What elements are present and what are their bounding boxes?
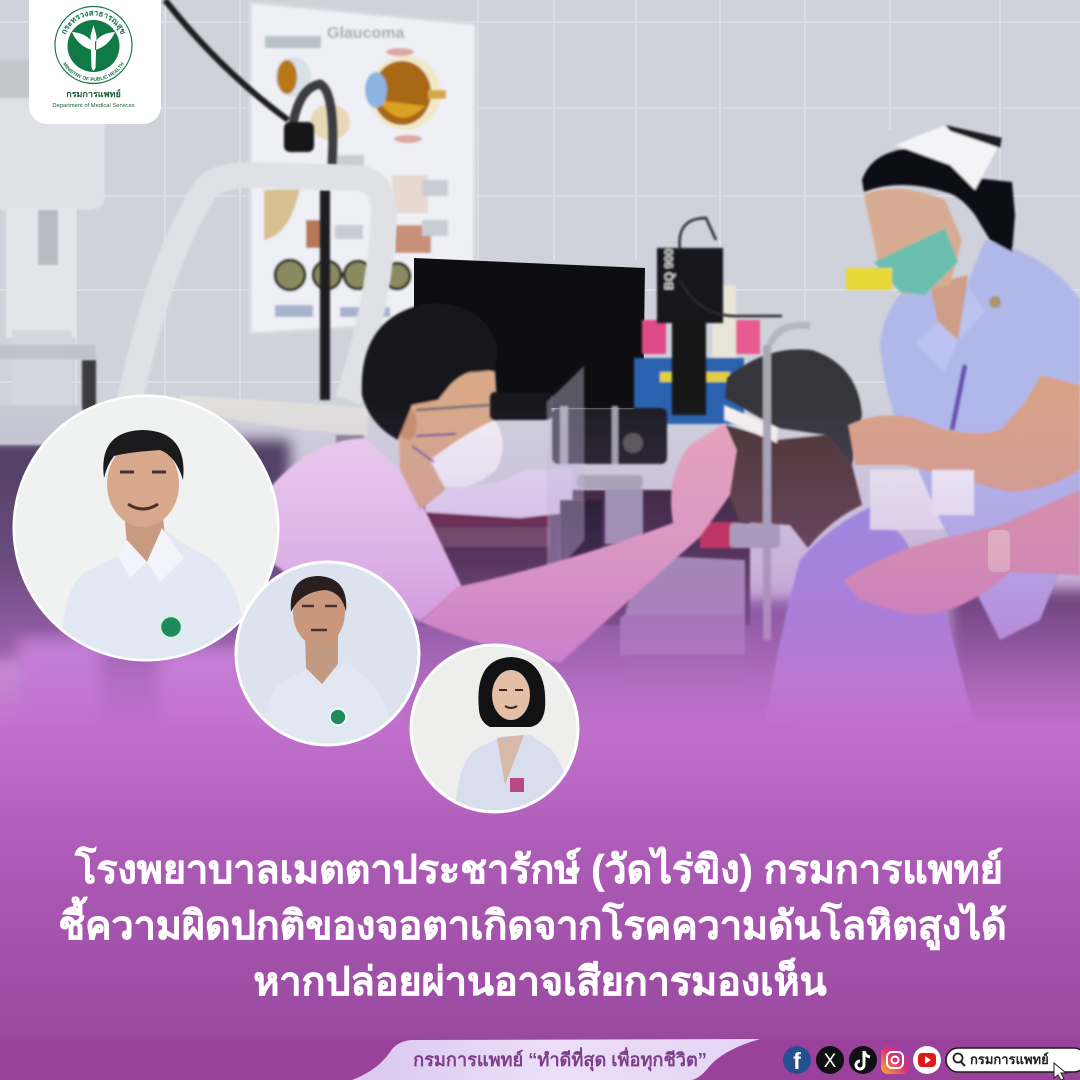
patient hair [725,349,862,465]
white supplies behind nurse [870,470,960,530]
nurse collar [915,285,985,372]
ministry emblem: กระทรวงสาธารณสุข [62,10,126,34]
icon: facebook [783,1046,811,1074]
desk with papers [420,468,750,625]
icon: tiktok [849,1046,877,1074]
slogan ribbon: กรมการแพทย์ “ทำดีที่สุด เพื่อทุกชีวิต” [413,1047,707,1072]
yellow notice [846,268,892,290]
search box [946,1048,1080,1080]
coat badge [510,778,524,792]
nurse pin [989,296,1001,308]
icon: facebook: f [793,1048,801,1074]
doctor hair [362,303,498,440]
icon: instagram [881,1046,909,1074]
eyepiece [490,392,552,420]
BQ 900 lamp unit [657,218,782,415]
microscope body [552,408,667,464]
facial features [499,690,523,708]
doctor mask [430,420,503,488]
shirt [62,530,242,659]
ministry emblem: MINISTRY OF PUBLIC HEALTH [63,62,124,81]
patient neck and face [722,425,862,548]
chin-rest crossbar [730,523,780,548]
shirt [265,662,392,750]
tiled wall [0,0,1080,780]
dark lower-room equipment [0,440,1080,770]
collar [118,528,184,582]
badge [160,616,182,638]
slogan ribbon [352,1039,760,1080]
headline line 2: ชี้ความผิดปกติของจอตาเกิดจากโรคความดันโลหิตสูงได้ [58,896,1007,950]
acrylic shield [547,366,584,582]
doctor body [268,438,462,622]
logo card [29,0,161,124]
doctor arm and hand [420,423,737,663]
facial features [120,472,166,509]
blouse [497,735,524,785]
icon: X: X [824,1051,837,1072]
patient headband [724,405,778,443]
face [492,670,530,720]
patient gown [765,505,975,725]
search box: กรมการแพทย์ [970,1052,1049,1067]
doctor head [398,370,498,510]
chin-rest base [625,555,745,622]
nurse surgical mask [874,228,958,295]
doctor mask strap [412,434,456,462]
department name: กรมการแพทย์ [66,88,121,99]
nurse uniform [880,240,1080,640]
icon: cursor [1054,1063,1066,1080]
slit lamp [490,366,780,695]
nurse [846,125,1080,640]
glaucoma poster [250,2,476,334]
hair [291,576,346,612]
red accents [700,522,742,548]
assisting hands [843,490,1080,615]
doctor [268,303,503,622]
left instrument [0,60,105,445]
arm support [577,475,643,489]
face [107,450,179,527]
nurse hair [862,148,1015,252]
logo card: Department of Medical Services [52,103,135,109]
facial features [302,606,337,630]
icon: youtube [913,1046,941,1074]
chin-rest pole [763,345,771,640]
white head-rest arch [130,175,384,545]
social icons [783,1046,941,1074]
glaucoma poster: Glaucoma [327,25,404,42]
nurse id card [932,470,974,515]
nurse neck [930,275,968,340]
hair [478,657,545,727]
neck [305,635,338,684]
nurse face [864,189,962,295]
monitor [414,258,645,408]
nurse cap [895,125,1002,190]
background photo: eye examination room [0,0,1080,780]
portrait 3 [408,642,582,816]
purple gradient overlay [0,380,1080,1080]
headline line 3: หากปล่อยผ่านอาจเสียการมองเห็น [253,958,827,1004]
headline line 1: โรงพยาบาลเมตตาประชารักษ์ (วัดไร่ขิง) กรมการแพทย์ [74,846,1003,892]
doctor glasses [416,405,490,410]
icon: X [816,1046,844,1074]
face [293,590,345,641]
black base box [560,500,602,565]
neck [125,520,165,562]
badge [330,709,346,725]
footer band [0,1039,1080,1080]
wrist watch [988,530,1010,572]
lamp pole and cable [165,0,333,400]
nurse arm [848,375,1080,492]
nurse lanyard [952,365,965,430]
BQ 900 lamp unit: BQ 900 [662,248,676,290]
patient [722,325,975,725]
portrait 1 [10,390,280,670]
hair [103,430,184,480]
headline [58,846,1007,1004]
doctor ear [399,408,417,440]
portrait 2 [234,560,424,750]
shelf with blue boxes [634,285,760,424]
ministry emblem [54,6,133,84]
white coat [455,735,570,810]
